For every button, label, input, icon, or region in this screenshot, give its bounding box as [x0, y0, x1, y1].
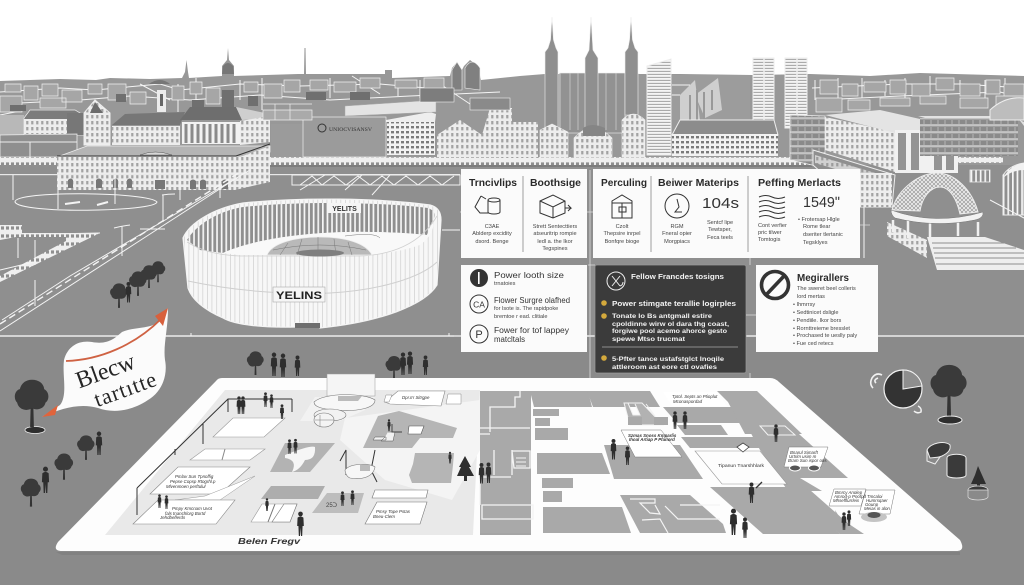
label card: corner pair: Gounp [865, 502, 879, 507]
caption: Feca teels [707, 235, 733, 241]
bullet text: 5-Pfter tance ustafstglct Inoqile [612, 356, 724, 363]
steps [927, 237, 1024, 270]
heading: Boothsige [530, 177, 581, 189]
label card: bottom: Pmpy Kmcnam Uvot [172, 506, 213, 511]
label card: mid: Ihoal Artiap P Pfanord [629, 437, 675, 442]
right large buildings [790, 98, 1024, 258]
stadium top sign [328, 203, 361, 213]
bullet list: • Prochased te ueslly paly [793, 333, 857, 339]
bullet text: forgiwe pool acemo ahorce gesto [612, 328, 727, 335]
pine and can right [968, 466, 988, 500]
text block [494, 271, 565, 287]
text block: matcltals [494, 335, 525, 344]
label card: top [150, 467, 255, 500]
pavilion: small [340, 450, 377, 482]
label card: bottom: Jehdbeflerds [159, 515, 186, 520]
label card: corner pair: Humrsqaer [866, 498, 888, 503]
label card: top: Pepse Copsp Rtogrhl.p [170, 479, 216, 484]
speech bubble callout [42, 308, 168, 417]
caption: Ablderp excidity [472, 231, 512, 237]
caption: Tegspines [542, 246, 568, 252]
ring [891, 210, 983, 224]
tile: numbers: 25ᑐ [326, 503, 338, 509]
fence lines [137, 399, 292, 515]
bullet list: Tegsklyes [803, 240, 828, 246]
icon: circle figure [665, 194, 689, 218]
caption: Czolt [616, 224, 629, 230]
floor plan base [56, 378, 962, 555]
people on the plan [158, 392, 851, 538]
label card: top: Pmlav Sun Tpnoffig [175, 474, 214, 479]
text block [797, 286, 856, 300]
label card: top [663, 392, 727, 406]
label card: bowls: Urtrim usim m [789, 454, 817, 459]
caption: Strett Sentecttiers [533, 224, 577, 230]
leader lines from panels [454, 170, 870, 388]
caption [758, 223, 787, 243]
icon: P circle: P [475, 329, 483, 341]
twin white towers [753, 58, 807, 128]
label card: mid: Szmas Snoss Kmparlis [628, 433, 677, 438]
dome structure and steps [887, 173, 1024, 270]
icon: box [540, 195, 571, 218]
caption: Tewtsper, [708, 227, 732, 233]
bullet list: • Pendiile. Ikor bors [793, 318, 841, 324]
bullet list: dseriter tlertanic [803, 232, 843, 238]
stadium centre stage [267, 234, 380, 256]
label card: bowls: Bnarul Simarft [790, 450, 819, 455]
info panel: left group [461, 169, 587, 258]
info panel: right group [593, 169, 860, 258]
bubble text: Blecw [72, 348, 139, 394]
tree with dark base left [15, 380, 48, 434]
white plan board [695, 443, 787, 484]
floor plan: centre gray blocks [480, 391, 726, 533]
icon: waves [759, 196, 785, 218]
caption [707, 220, 733, 241]
icon: jar and sheet [475, 196, 500, 214]
white walkway patches [340, 400, 480, 500]
label card: lower centre [365, 490, 428, 524]
light zone [105, 390, 480, 535]
heading: Beiwer Materips [658, 177, 739, 189]
stadium floor [223, 222, 433, 255]
text block [494, 326, 569, 344]
caption: RGM [670, 224, 684, 230]
orange arrow [66, 319, 161, 361]
panel: dark principles [595, 265, 746, 373]
bullet list [798, 217, 843, 246]
heading: Peffing Merlacts [758, 177, 841, 189]
bullet text: Power stimgate terallie logirples [612, 299, 736, 308]
bullet list: • Rornttreieme bresslet [793, 326, 850, 332]
stadium main sign: YELINS [276, 290, 322, 302]
bullet text: Tonate lo Bs antgmall estire [612, 313, 713, 320]
caption: Fneral opier [662, 231, 692, 237]
gray block with wordmark: UNIOCVISANSV [329, 127, 372, 133]
bullet list: • Fue ced retecs [793, 341, 834, 347]
bullet list: • Frotersap Hlgle [798, 217, 840, 223]
caption: C3AE [485, 224, 500, 230]
stadium outer wall [183, 199, 441, 328]
label card: lower centre: Pmsy Tope Pstas [376, 509, 411, 514]
text block: Fower for tof lappey [494, 326, 569, 335]
heading: Fellow Francdes tosigns [631, 272, 724, 281]
label card: upper right: Dpr.Irr Sitrgpe [402, 395, 430, 400]
mid buildings [263, 88, 538, 158]
label card: upper right [384, 391, 461, 406]
net arch [892, 173, 978, 214]
label card: bottom: fals tnanchlorg Bortd [165, 511, 206, 516]
label card: corner pair: Meias in alon [864, 506, 890, 511]
gray wedge exhibit [363, 411, 457, 448]
stadium [183, 199, 441, 328]
bullets [601, 300, 607, 361]
label card: lower centre: Bneu-Clem [373, 514, 395, 519]
icon: CA circle: CA [473, 300, 485, 310]
label card: top: Tptol. Septs an Ptioplut [672, 394, 718, 399]
tile: tree patch [270, 443, 335, 472]
panel: prohibited list [756, 265, 878, 352]
heading: Perculing [601, 177, 647, 189]
text block: Flower Surgre olafhed [494, 296, 570, 305]
cathedral towers [540, 17, 645, 157]
caption: ledl a. the Ikor [537, 239, 573, 245]
tree right [931, 365, 967, 424]
text block: bremtoe r ead. clitiale [494, 314, 547, 320]
tile: numbers [312, 493, 364, 513]
bubble text: tartıtte [90, 366, 160, 412]
bubble text [72, 348, 160, 412]
bullet list: • Sedtinicet dsligle [793, 310, 838, 316]
caption: atseuritrip rompie [533, 231, 577, 237]
label card: mid [621, 430, 682, 457]
bullet list: Rome tlear [803, 224, 830, 230]
caption: pric tilwer [758, 230, 782, 236]
palace building [57, 144, 270, 190]
icon: prohibition [762, 272, 788, 298]
floor plan: left zone exhibits [133, 374, 474, 524]
trees and people lower left [21, 432, 102, 507]
roads and field lines [0, 170, 1024, 336]
stat: 104s [702, 195, 739, 212]
bullet text [612, 313, 729, 343]
skyline: left building cluster [0, 100, 270, 157]
tiles: small quad [251, 486, 325, 522]
grid building [672, 120, 778, 156]
label card: corner pair: Tmcaloi [867, 494, 883, 499]
caption: Tomtogis [758, 237, 781, 243]
railway band [0, 157, 1003, 175]
stadium top sign: YELITS [332, 206, 357, 213]
label card: top: Mlvenmoen perftulul [166, 484, 207, 489]
trees and people along the road [110, 261, 428, 379]
base with windows [887, 222, 927, 258]
label card: corner pair: Mhsefflurrleis [833, 498, 860, 503]
caption: Bonfqre bioge [605, 239, 639, 245]
stat: 1549ʺ [803, 194, 840, 211]
caption [533, 224, 577, 252]
text block: The sweret beel colleris [797, 286, 856, 292]
text block [494, 296, 570, 320]
text block: lord mertas [797, 294, 825, 300]
label card: corner pair: Bmrcy Anolep [835, 490, 863, 495]
pavilion: canopy and seating [300, 374, 375, 427]
stadium inner stands [187, 203, 435, 253]
striped tower and far blocks [647, 59, 750, 155]
white plan board: Tipanun Tnarshhlark [718, 463, 765, 469]
floor plan: right gray blocks [621, 391, 895, 534]
bullet text: attleroom ast eore ctl ovafies [612, 364, 717, 371]
icon: filled circle [470, 269, 488, 287]
pie chart icon right [871, 370, 922, 413]
floor plan caption: Belen Fregv [238, 536, 302, 546]
text block: trnatoies [494, 281, 516, 287]
caption: dsord. Benge [475, 239, 509, 245]
caption: Sentcf lipe [707, 220, 733, 226]
label card: bowls [784, 447, 828, 471]
gray grid exhibit [409, 453, 454, 483]
caption: Thepsire inrpel [604, 231, 640, 237]
bullet list [793, 302, 857, 347]
heading: Trncivlips [469, 177, 517, 189]
skyline: distant city mass [0, 48, 1024, 165]
label card: corner pair [829, 489, 895, 522]
label card: bottom [133, 500, 235, 524]
heading: Megirallers [797, 272, 849, 284]
caption: Morgpiacs [664, 239, 690, 245]
canisters right [927, 443, 966, 478]
text block: for lsote is. The rapidpoke [494, 306, 558, 312]
caption: Cont verfier [758, 223, 787, 229]
caption [604, 224, 640, 245]
label card: top: Mconaspordad [673, 399, 703, 404]
icon: house [612, 195, 632, 218]
stadium main sign [273, 287, 325, 302]
panel: power list [461, 265, 587, 352]
gray block with wordmark [271, 117, 386, 157]
stand: upper frame [213, 418, 285, 437]
bullet text: spewe Mtso trucmat [612, 336, 686, 343]
bullet text: cpoldinne wirw ol dara thg coast, [612, 321, 729, 328]
caption [472, 224, 512, 245]
caption [662, 224, 692, 245]
stand: second frame [190, 449, 265, 460]
icon: tool circle [607, 272, 625, 290]
text block: Power looth size [494, 271, 565, 280]
bullet list: • Ihmrrsy [793, 302, 815, 308]
icon: pine tree [457, 456, 474, 481]
label card: corner pair: Amrod-p Pnofpd [833, 494, 867, 499]
bullet text [612, 356, 724, 371]
label card: bowls: Bram Sun ispor ons [788, 458, 827, 463]
